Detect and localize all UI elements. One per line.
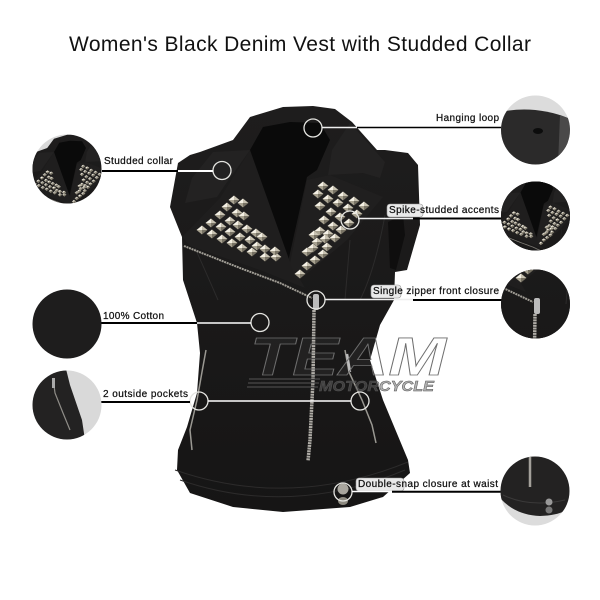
vest photo illustration bbox=[170, 106, 420, 512]
marker bbox=[307, 291, 325, 309]
watermark: team: TEAM bbox=[250, 327, 447, 387]
zipper pull bbox=[313, 294, 319, 310]
leader bbox=[325, 298, 413, 300]
label: Single zipper front closure bbox=[373, 286, 499, 297]
right studs bbox=[294, 182, 370, 278]
watermark stripes bbox=[247, 379, 320, 387]
leader bbox=[178, 170, 213, 172]
leader bbox=[322, 126, 357, 128]
leader bbox=[352, 490, 392, 492]
label backing bbox=[371, 285, 401, 298]
leader bbox=[197, 322, 251, 324]
marker bbox=[251, 314, 269, 332]
thumbnail: hanging loop bbox=[501, 96, 570, 164]
callout: studded collar bbox=[102, 156, 231, 180]
left studs bbox=[196, 196, 282, 262]
label: Studded collar bbox=[104, 156, 174, 167]
callout: zipper bbox=[307, 285, 502, 309]
left lapel bbox=[182, 150, 305, 288]
right pocket zipper bbox=[345, 350, 376, 443]
thumbnail: cotton bbox=[32, 290, 102, 358]
marker bbox=[213, 162, 231, 180]
label: Hanging loop bbox=[436, 113, 499, 124]
waist snaps bbox=[338, 484, 348, 505]
armhole lining bbox=[388, 215, 405, 270]
callout: pockets bbox=[101, 389, 369, 410]
thumbnail: zipper closure bbox=[501, 270, 570, 338]
thumbnail: pockets bbox=[32, 370, 102, 440]
seams bbox=[175, 215, 408, 497]
right marker bbox=[351, 392, 369, 410]
vest body bbox=[170, 106, 420, 512]
thumbnail: studded collar bbox=[32, 134, 102, 204]
right lapel bbox=[290, 175, 383, 282]
thumbnail: double snap bbox=[500, 456, 570, 526]
watermark: motorcycle: MOTORCYCLE bbox=[319, 378, 435, 395]
label backing bbox=[356, 478, 404, 491]
callout: hanging loop bbox=[304, 113, 502, 137]
label: Spike-studded accents bbox=[389, 205, 499, 216]
watermark bbox=[247, 327, 447, 395]
marker bbox=[334, 483, 352, 501]
thumbnail: spike-studded accents bbox=[501, 182, 570, 250]
label: Double-snap closure at waist bbox=[358, 479, 498, 490]
label backing bbox=[387, 204, 423, 217]
left collar flap bbox=[185, 150, 250, 203]
callout: spike-studded accents bbox=[341, 204, 502, 229]
pocket pull bbox=[347, 354, 350, 372]
callout: cotton bbox=[101, 311, 269, 332]
leader bbox=[358, 218, 413, 220]
marker bbox=[341, 211, 359, 229]
title: Women's Black Denim Vest with Studded Collar bbox=[69, 33, 531, 56]
label: 2 outside pockets bbox=[103, 389, 188, 400]
callout: double snap bbox=[334, 478, 502, 501]
marker bbox=[304, 119, 322, 137]
front zipper bbox=[308, 310, 314, 461]
lapel zipper bbox=[184, 246, 312, 298]
left pocket zipper bbox=[190, 350, 206, 450]
leader bbox=[208, 400, 351, 402]
label: 100% Cotton bbox=[103, 311, 164, 322]
left marker bbox=[190, 392, 208, 410]
inner lining bbox=[250, 122, 330, 262]
right collar flap bbox=[328, 123, 385, 178]
